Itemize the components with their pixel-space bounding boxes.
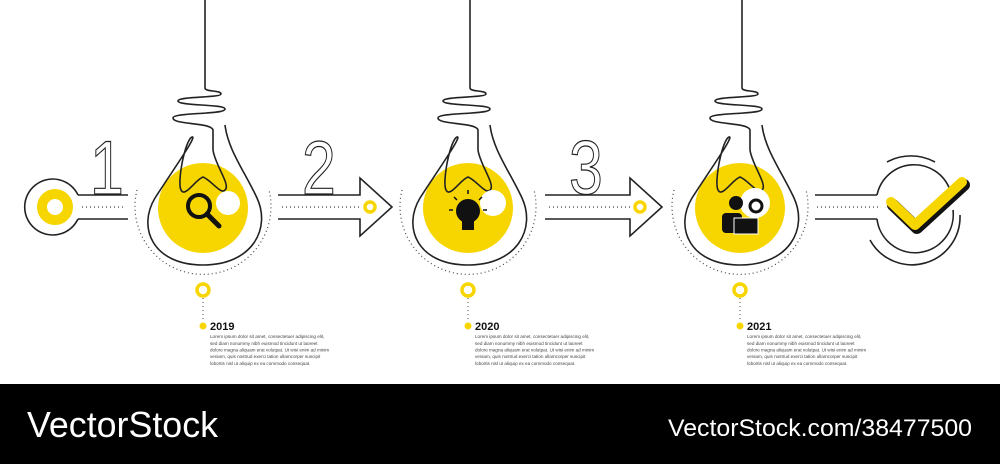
footer band: VectorStock.com/38477500 <box>668 415 972 442</box>
text block 2021: lobortis nisl ut aliquip ex ea commodo consequat. <box>747 361 847 366</box>
text block 2021: veniam, quis nostrud exerci tation ullamcorper suscipit <box>747 354 858 359</box>
text block 2020: Lorem ipsum dolor sit amet, consectetuer adipiscing elit, <box>475 334 589 339</box>
text block 2020 <box>475 321 594 366</box>
text block 2020: dolore magna aliquam erat volutpat. Ut wisi enim ad minim <box>475 348 594 352</box>
arrow 3 <box>545 178 662 236</box>
text block 2019 <box>210 321 329 366</box>
text block 2021: sed diam nonummy nibh euismod tincidunt ut laoreet <box>747 341 855 346</box>
bulb 1 <box>135 0 271 330</box>
start node <box>25 179 128 235</box>
text block 2021: 2021 <box>747 321 771 333</box>
text block 2019: sed diam nonummy nibh euismod tincidunt ut laoreet <box>210 341 318 346</box>
text block 2020: 2020 <box>475 321 499 333</box>
number 2: 2 <box>302 126 336 211</box>
number 1: 1 <box>90 126 124 211</box>
text block 2019: 2019 <box>210 321 234 333</box>
footer band: VectorStock <box>27 404 219 445</box>
footer band <box>0 384 1000 464</box>
text block 2019: lobortis nisl ut aliquip ex ea commodo consequat. <box>210 361 310 366</box>
icon: person with laptop <box>722 196 762 234</box>
bulb 2 <box>400 0 536 330</box>
number 3: 3 <box>569 126 603 211</box>
icon: magnifier <box>188 195 219 226</box>
icon: light bulb <box>449 190 487 230</box>
text block 2019: veniam, quis nostrud exerci tation ullamcorper suscipit <box>210 354 321 359</box>
text block 2021: Lorem ipsum dolor sit amet, consectetuer adipiscing elit, <box>747 334 861 339</box>
text block 2019: dolore magna aliquam erat volutpat. Ut wisi enim ad minim <box>210 348 329 352</box>
text block 2020: veniam, quis nostrud exerci tation ullamcorper suscipit <box>475 354 586 359</box>
text block 2019: Lorem ipsum dolor sit amet, consectetuer adipiscing elit, <box>210 334 324 339</box>
text block 2021 <box>747 321 866 366</box>
text block 2020: sed diam nonummy nibh euismod tincidunt ut laoreet <box>475 341 583 346</box>
text block 2020: lobortis nisl ut aliquip ex ea commodo consequat. <box>475 361 575 366</box>
connector to check <box>815 195 878 219</box>
bulb 3 <box>672 0 808 330</box>
text block 2021: dolore magna aliquam erat volutpat. Ut wisi enim ad minim <box>747 348 866 352</box>
check icon <box>870 156 964 265</box>
arrow 2 <box>278 178 392 236</box>
